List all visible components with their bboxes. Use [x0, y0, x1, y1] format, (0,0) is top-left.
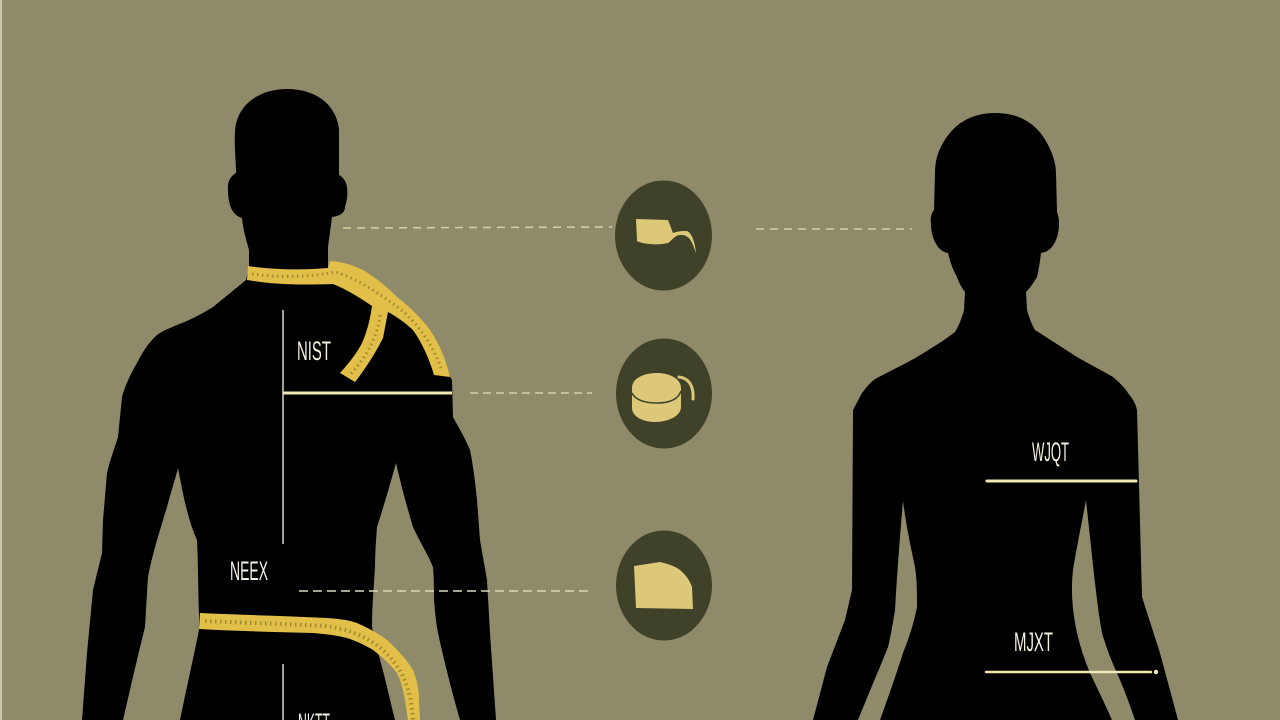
horizontal measure line: [283, 392, 452, 394]
tape: neck and shoulder: [247, 261, 450, 382]
dashed leader: upper left: [343, 227, 612, 228]
dashed leader: lower left: [299, 590, 592, 592]
icon badge: bottom: [616, 530, 712, 640]
male silhouette with tape and labels: [82, 89, 496, 720]
waist line end dot: [1154, 670, 1158, 674]
bust line: [987, 480, 1136, 482]
label: MJXT: MJXT: [1014, 627, 1053, 657]
waist line: [986, 671, 1151, 673]
dashed leader: middle left: [470, 392, 592, 394]
vertical measure line upper: [282, 310, 284, 544]
dashed leader: upper right: [756, 228, 912, 230]
icon badge: middle: [616, 338, 712, 448]
label: NIST: NIST: [297, 336, 331, 366]
label: NEEX: NEEX: [230, 556, 268, 586]
tape: waist: [199, 613, 420, 720]
female silhouette with lines and labels: WJQT: [1032, 437, 1069, 467]
male body: [82, 89, 496, 720]
vertical measure line lower: [282, 664, 284, 720]
icon badge: top: [615, 180, 712, 290]
female body: [813, 113, 1178, 720]
female silhouette with lines and labels: [813, 113, 1178, 720]
